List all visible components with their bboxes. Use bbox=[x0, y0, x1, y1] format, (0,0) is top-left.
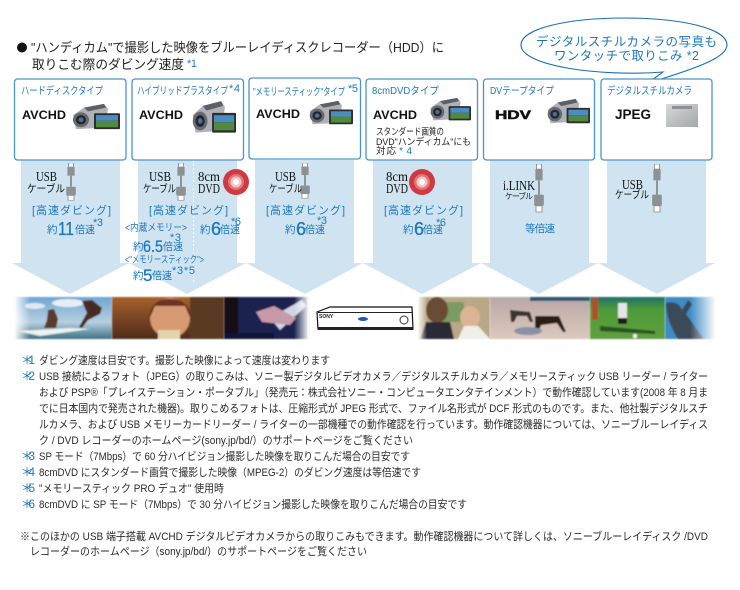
column: hybrid, USB and 8cm DVD speeds: 約 bbox=[133, 240, 144, 253]
column: hybrid, USB and 8cm DVD speeds: 5 bbox=[143, 266, 152, 285]
note 2 bbox=[21, 369, 708, 447]
note 4: ＊4 bbox=[21, 465, 35, 479]
column: hybrid, USB and 8cm DVD speeds: [高速ダビング] bbox=[149, 203, 228, 217]
column: 8cm DVD, 6x speed: 倍速 bbox=[423, 224, 443, 236]
panel: memory stick type bbox=[249, 78, 360, 159]
column: USB cable, 11x speed: *3 bbox=[93, 217, 103, 229]
column: USB cable, 11x speed: 約 bbox=[47, 223, 58, 236]
panel: memory stick type: *5 bbox=[348, 83, 358, 95]
note 5: "メモリースティック PRO デュオ" 使用時 bbox=[39, 481, 224, 495]
callout: digital still camera photos: デジタルスチルカメラの写真も bbox=[536, 34, 717, 49]
column: hybrid, USB and 8cm DVD speeds: *6 bbox=[231, 216, 241, 228]
column: 8cm DVD, 6x speed: DVD bbox=[386, 182, 408, 197]
panel: digital still camera: JPEG bbox=[615, 107, 651, 122]
note 2: ク / DVD レコーダーのホームページ(sony.jp/bd/）のサポートページをご覧ください bbox=[39, 433, 413, 447]
panel: hybrid plus type bbox=[132, 79, 244, 160]
panel: DV tape type: DVテープタイプ bbox=[490, 85, 554, 97]
note 3: SP モード（7Mbps）で 60 分ハイビジョン撮影した映像を取りこんだ場合の目安です bbox=[39, 449, 410, 463]
column: memory stick, 6x speed bbox=[266, 163, 345, 239]
column: still camera USB: ケーブル bbox=[615, 188, 649, 201]
panel: 8cm DVD type: AVCHD bbox=[373, 110, 417, 122]
column: hybrid, USB and 8cm DVD speeds: <"メモリースティック"> bbox=[125, 254, 204, 266]
callout: digital still camera photos: ワンタッチで取りこみ *2 bbox=[554, 49, 699, 63]
product: Blu-ray recorder bbox=[317, 307, 413, 330]
note 5: ＊5 bbox=[21, 481, 35, 495]
photo: surfers bbox=[15, 297, 112, 339]
column: hybrid, USB and 8cm DVD speeds: 倍速 bbox=[163, 241, 183, 253]
note 2: ＊2 bbox=[21, 369, 35, 383]
supplementary note bbox=[20, 529, 708, 558]
column: i.LINK, normal speed: i.LINK bbox=[503, 179, 535, 194]
column: USB cable, 11x speed bbox=[27, 163, 111, 239]
column: memory stick, 6x speed: *3 bbox=[317, 215, 327, 227]
column: USB cable, 11x speed: 11 bbox=[58, 219, 74, 239]
note 3: ＊3 bbox=[21, 449, 35, 463]
note 6: 8cmDVD に SP モード（7Mbps）で 30 分ハイビジョン撮影した映像を取りこんだ場合の目安です bbox=[39, 497, 467, 511]
column: hybrid, USB and 8cm DVD speeds: ケーブル bbox=[143, 182, 176, 195]
photo: soccer players bbox=[590, 297, 665, 339]
photo: child with candles bbox=[112, 297, 224, 339]
photo strip bbox=[14, 296, 716, 340]
column: memory stick, 6x speed: [高速ダビング] bbox=[266, 203, 345, 217]
column: hybrid, USB and 8cm DVD speeds: 倍速 bbox=[220, 224, 240, 236]
column: i.LINK, normal speed bbox=[503, 164, 556, 235]
column: hybrid, USB and 8cm DVD speeds: 約 bbox=[133, 269, 144, 282]
photo: whale bbox=[665, 297, 715, 339]
panel: DV tape type: HDV bbox=[495, 108, 531, 122]
product: Blu-ray recorder: SONY bbox=[319, 314, 334, 320]
panel: memory stick type: "メモリースティック"タイプ bbox=[253, 86, 345, 98]
column: hybrid, USB and 8cm DVD speeds: DVD bbox=[198, 182, 220, 197]
icon: still camera bbox=[666, 104, 698, 127]
column: memory stick, 6x speed: 倍速 bbox=[305, 224, 325, 236]
column: 8cm DVD, 6x speed bbox=[384, 169, 463, 239]
column: i.LINK, normal speed: 等倍速 bbox=[525, 222, 556, 235]
column: i.LINK, normal speed: ケーブル bbox=[505, 191, 533, 201]
panel: 8cm DVD type: DVD"ハンディカム"にも bbox=[376, 136, 471, 148]
note 1: ＊1 bbox=[21, 353, 35, 367]
title bbox=[17, 40, 444, 72]
panel: memory stick type: AVCHD bbox=[256, 109, 300, 121]
column: 8cm DVD, 6x speed: *6 bbox=[436, 217, 446, 229]
panel: 8cm DVD type bbox=[366, 79, 478, 160]
column: USB cable, 11x speed: USB bbox=[36, 170, 57, 185]
column: USB cable, 11x speed: ケーブル bbox=[27, 182, 65, 195]
callout: digital still camera photos bbox=[521, 18, 727, 83]
panel: digital still camera bbox=[601, 79, 712, 160]
column: 8cm DVD, 6x speed: 8cm bbox=[386, 170, 408, 185]
panel: digital still camera: デジタルスチルカメラ bbox=[607, 84, 692, 97]
note 1: ダビング速度は目安です。撮影した映像によって速度は変わります bbox=[39, 353, 330, 367]
panel: 8cm DVD type: *4 bbox=[399, 146, 412, 157]
panel: hard disk type bbox=[14, 79, 126, 160]
strip edge fades bbox=[14, 296, 716, 340]
column: hybrid, USB and 8cm DVD speeds: 6 bbox=[211, 219, 221, 239]
column: still camera USB bbox=[615, 164, 662, 212]
note 6: ＊6 bbox=[21, 497, 35, 511]
panel: hard disk type: AVCHD bbox=[22, 110, 66, 122]
panel: 8cm DVD type: スタンダード画質の bbox=[376, 126, 444, 138]
column: USB cable, 11x speed: 倍速 bbox=[75, 224, 95, 236]
panel: hard disk type: ハードディスクタイプ bbox=[21, 84, 103, 97]
footnotes bbox=[20, 353, 708, 558]
title: "ハンディカム"で撮影した映像をブルーレイディスクレコーダー（HDD）に bbox=[31, 40, 444, 55]
panel: 8cm DVD type: 対応 bbox=[376, 145, 396, 157]
panel: 8cm DVD type: 8cmDVDタイプ bbox=[372, 85, 439, 97]
photo: piano hands bbox=[224, 297, 308, 339]
column: hybrid, USB and 8cm DVD speeds: USB bbox=[149, 170, 171, 185]
column: 8cm DVD, 6x speed: 6 bbox=[414, 219, 424, 239]
panel: hybrid plus type: AVCHD bbox=[139, 110, 183, 122]
column: hybrid, USB and 8cm DVD speeds: 8cm bbox=[198, 170, 220, 185]
panel: hybrid plus type: *4 bbox=[229, 83, 240, 95]
photo: wedding couple bbox=[418, 297, 490, 339]
column: hybrid, USB and 8cm DVD speeds: 約 bbox=[200, 223, 210, 236]
column: 8cm DVD, 6x speed: 約 bbox=[403, 223, 414, 236]
column: hybrid, USB and 8cm DVD speeds: 倍速 bbox=[152, 270, 172, 282]
column: memory stick, 6x speed: USB bbox=[275, 170, 296, 185]
title: 取りこむ際のダビング速度 bbox=[32, 57, 184, 72]
column: hybrid, USB and 8cm DVD speeds: <内蔵メモリー> bbox=[125, 221, 187, 234]
panel: DV tape type bbox=[484, 79, 594, 160]
column: hybrid, USB and 8cm DVD speeds: *3*5 bbox=[172, 265, 195, 277]
supplementary note: レコーダーのホームページ（sony.jp/bd/）のサポートページをご覧ください bbox=[30, 544, 367, 558]
column: hybrid, USB and 8cm DVD speeds: 6.5 bbox=[143, 237, 163, 256]
flow arrows bbox=[12, 160, 715, 294]
panel: hybrid plus type: ハイブリッドプラスタイプ bbox=[137, 84, 228, 97]
column: still camera USB: USB bbox=[622, 178, 643, 193]
column: memory stick, 6x speed: 6 bbox=[296, 219, 306, 239]
column: hybrid, USB and 8cm DVD speeds: *3 bbox=[170, 232, 181, 244]
title: *1 bbox=[187, 58, 197, 70]
photo: horses on beach bbox=[490, 297, 590, 339]
column: memory stick, 6x speed: 約 bbox=[285, 223, 296, 236]
column: USB cable, 11x speed: [高速ダビング] bbox=[32, 203, 111, 217]
note 4: 8cmDVD にスタンダード画質で撮影した映像（MPEG-2）のダビング速度は等倍速です bbox=[39, 465, 421, 479]
column: hybrid, USB and 8cm DVD speeds bbox=[125, 163, 249, 285]
column: 8cm DVD, 6x speed: [高速ダビング] bbox=[384, 203, 463, 217]
column: memory stick, 6x speed: ケーブル bbox=[269, 182, 302, 195]
